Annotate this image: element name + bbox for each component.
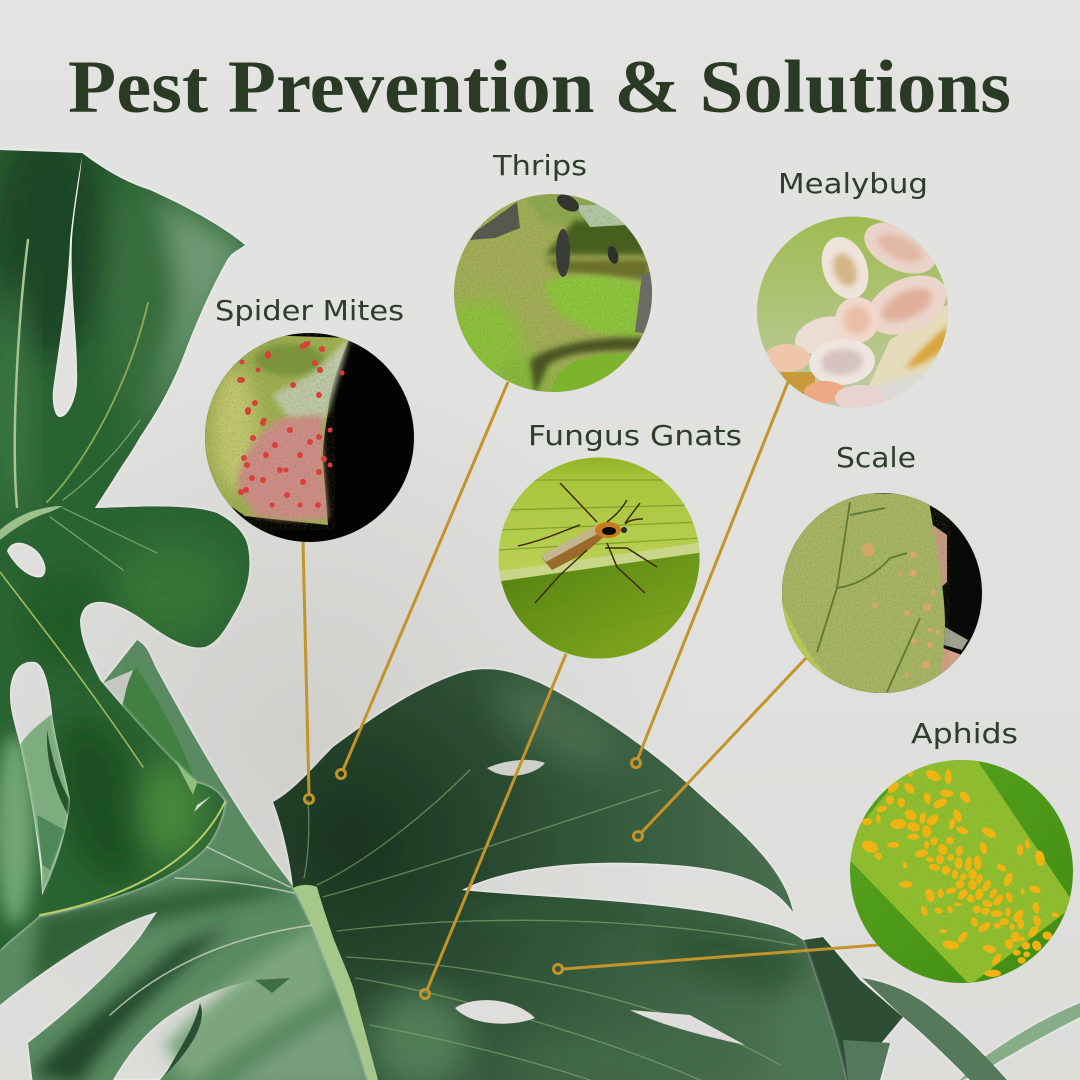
photo: Fungus Gnats [495, 455, 705, 665]
plant: back leaf [0, 640, 385, 1080]
connector: Mealybug [632, 382, 788, 768]
connector: Aphids [554, 945, 878, 974]
title: Pest Prevention & Solutions [68, 46, 1011, 129]
label: Mealybug: Mealybug [778, 168, 928, 200]
front leaf veins [304, 770, 795, 1080]
connector: Spider Mites [303, 542, 314, 804]
label: Aphids: Aphids [911, 718, 1018, 750]
photo: Aphids [850, 760, 1073, 983]
plant: hole filler behind left leaf [20, 714, 70, 895]
label: Fungus Gnats: Fungus Gnats [528, 420, 742, 452]
photo: Thrips [454, 194, 652, 392]
plant: left monstera leaf [0, 120, 250, 950]
midrib [293, 885, 378, 1080]
connector: Fungus Gnats [420, 654, 566, 998]
label: Thrips: Thrips [492, 150, 587, 182]
plant: large front monstera leaf [273, 664, 847, 1080]
back leaf inner fold [122, 668, 195, 783]
photo: Spider Mites [200, 330, 420, 550]
label: Spider Mites: Spider Mites [215, 295, 404, 327]
connector: Thrips [336, 382, 508, 778]
label: Scale: Scale [836, 442, 916, 474]
connector: Scale [634, 658, 806, 840]
photo: Mealybug [757, 216, 948, 408]
plant: thin blades and lower right leaves [803, 937, 1080, 1080]
left leaf midrib and veins [0, 506, 63, 540]
photo: Scale [782, 493, 982, 693]
